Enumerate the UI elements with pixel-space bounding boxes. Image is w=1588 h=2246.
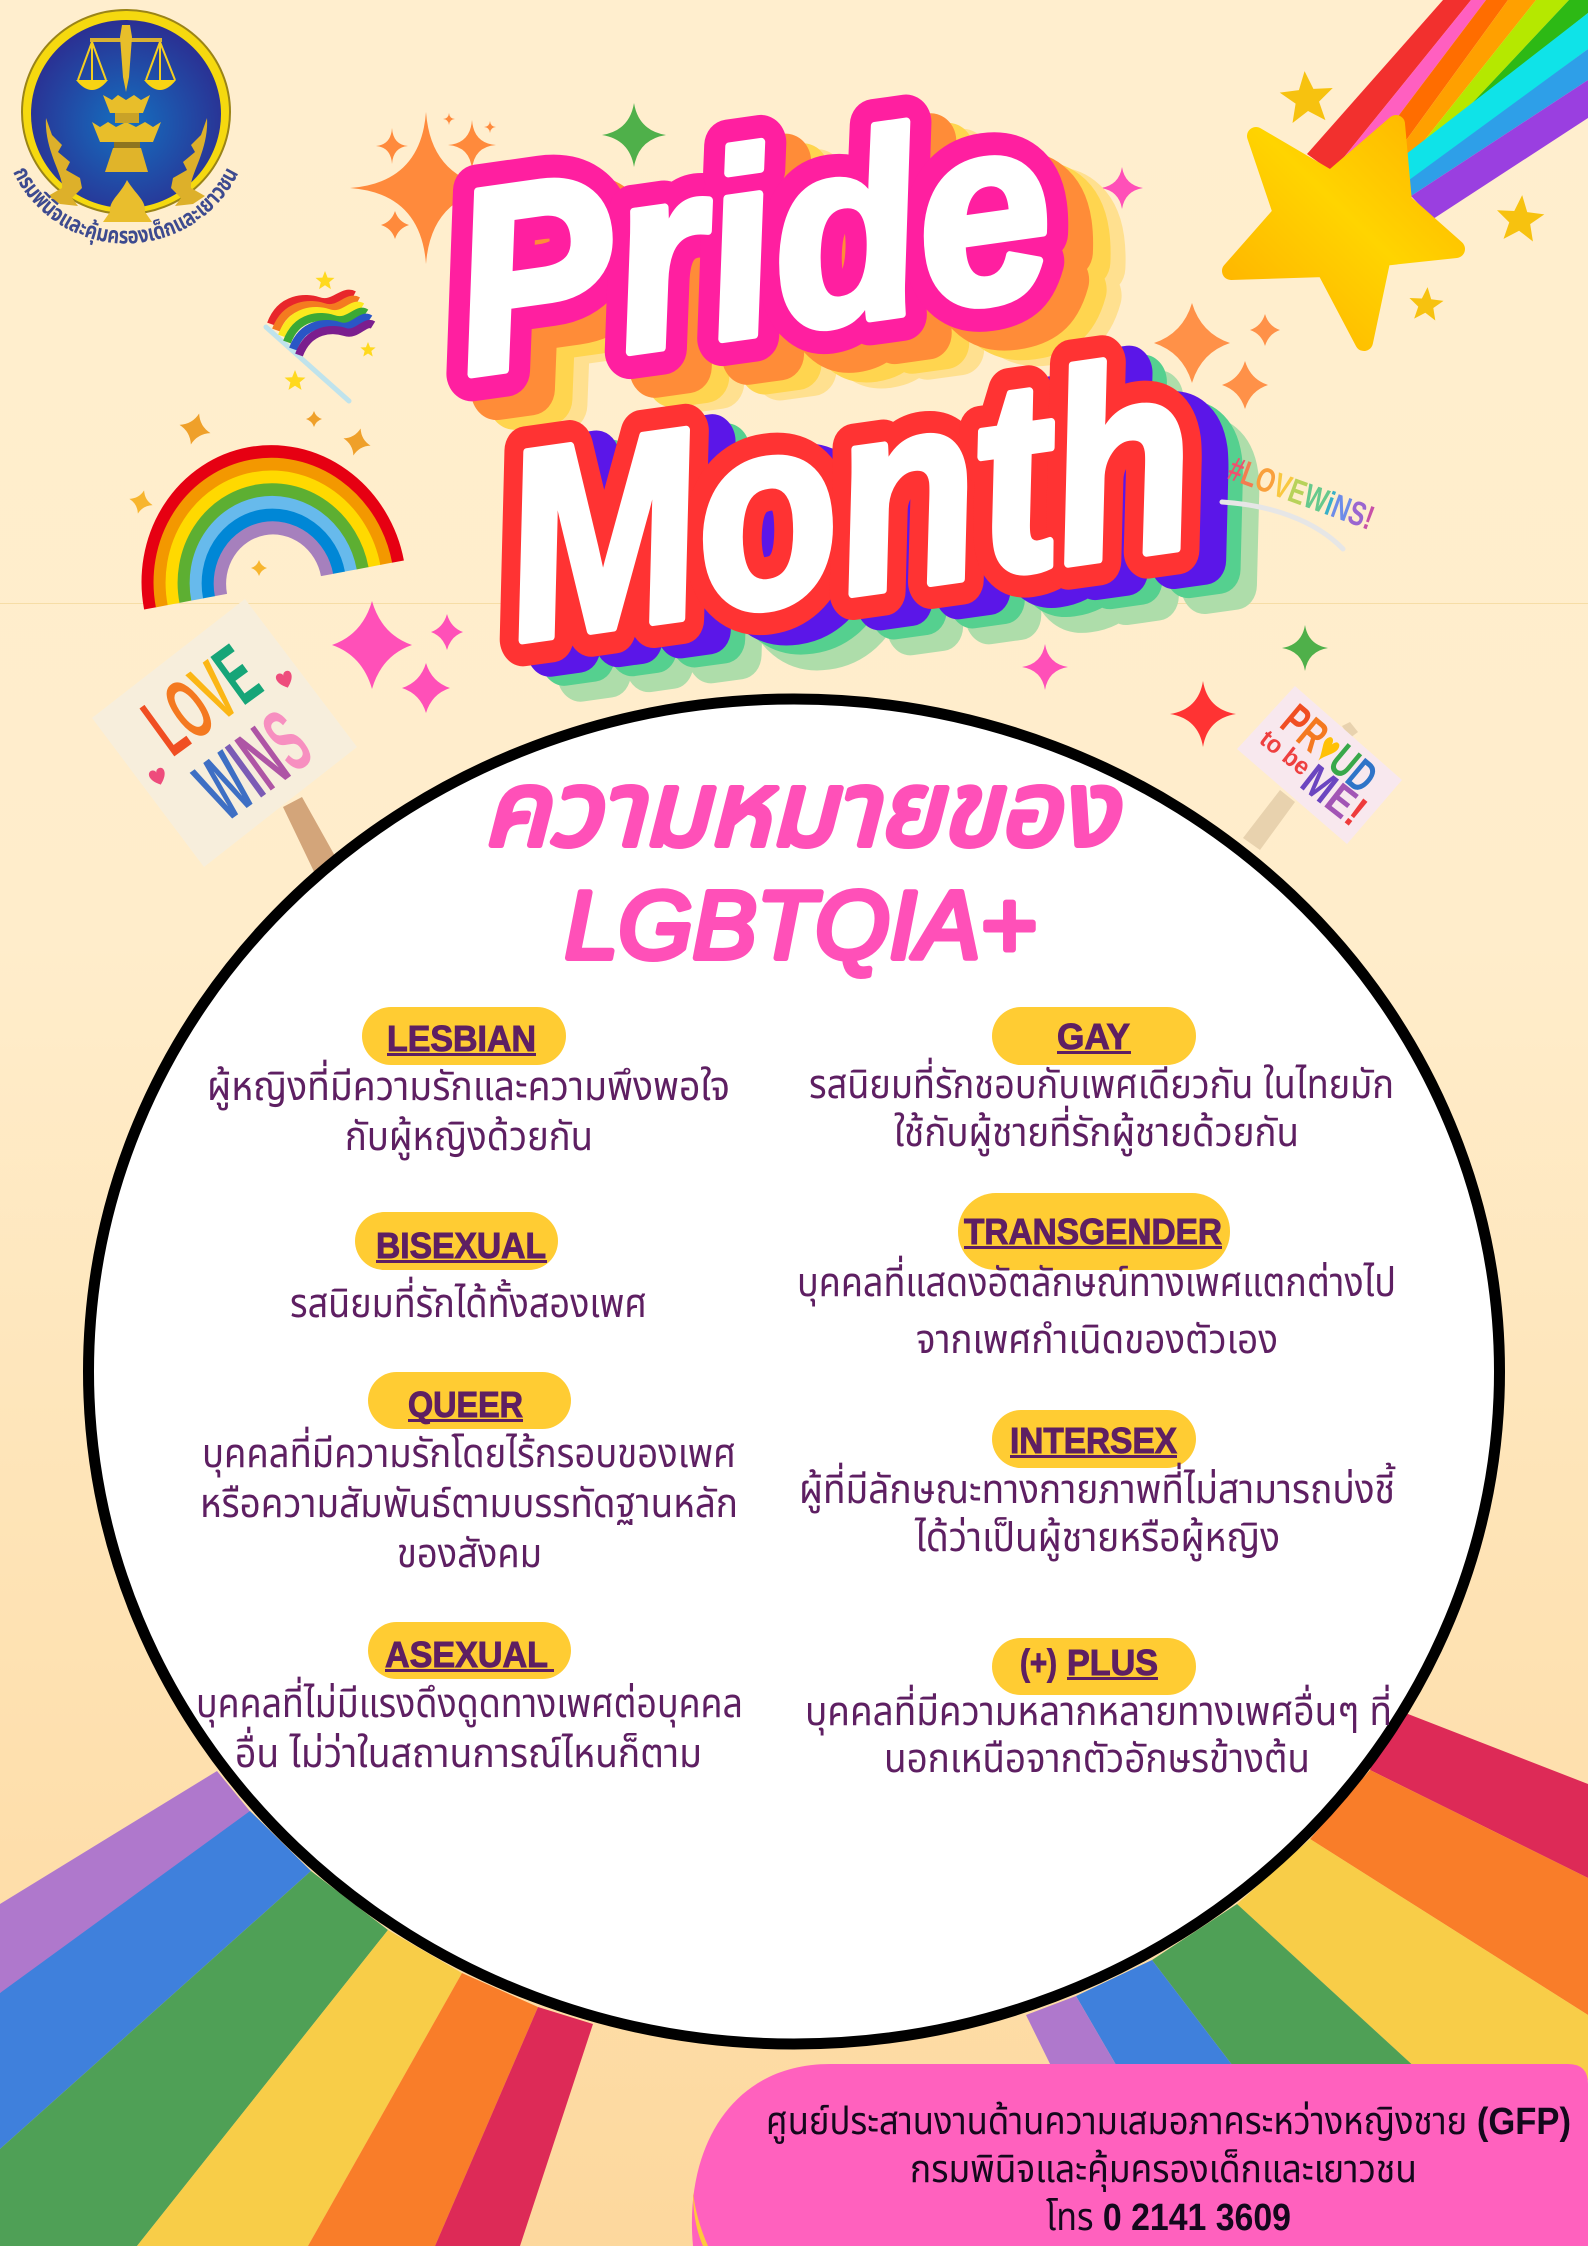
main white circle bbox=[88, 699, 1500, 2044]
entry: plus: PLUS bbox=[1067, 1642, 1158, 1683]
sparkles: right misc bbox=[1022, 167, 1328, 747]
title: Pride: Pride bbox=[491, 91, 1126, 465]
sign: love wins: LOVE bbox=[127, 628, 277, 773]
hashtag: love wins: #LOVEWiNS! bbox=[1223, 450, 1379, 538]
title: Pride: Pride bbox=[476, 85, 1111, 459]
small stars bbox=[1278, 69, 1546, 321]
title: Month: Month bbox=[484, 304, 1211, 698]
title: Pride: Pride bbox=[434, 57, 1069, 430]
footer text bbox=[766, 2101, 1571, 2239]
sparkles: pink left bbox=[332, 601, 463, 713]
entry: intersex: INTERSEX bbox=[1010, 1420, 1177, 1461]
entry: asexual: อื่น ไม่ว่าในสถานการณ์ไหนก็ตาม bbox=[235, 1726, 702, 1776]
title: Month: Month bbox=[542, 339, 1269, 734]
rainbow rays lower right bbox=[1026, 1700, 1588, 2080]
entry: asexual: บุคคลที่ไม่มีแรงดึงดูดทางเพศต่อบุคคล bbox=[196, 1676, 743, 1727]
entry: queer: QUEER bbox=[408, 1384, 523, 1425]
footer text: ศูนย์ประสานงานด้านความเสมอภาคระหว่างหญิงชาย (GFP) bbox=[766, 2101, 1571, 2144]
sign: proud to be me bbox=[1237, 686, 1402, 850]
footer panel bbox=[692, 2064, 1588, 2246]
icon: department logo: กรมพินิจและคุ้มครองเด็กและเยาวชน bbox=[14, 168, 238, 246]
entry: lesbian: กับผู้หญิงด้วยกัน bbox=[345, 1115, 593, 1160]
sparkles: gold by rainbow bbox=[126, 409, 374, 576]
entry: plus bbox=[805, 1638, 1392, 1781]
heading: ความหมายของ bbox=[483, 752, 1120, 868]
entry: gay: รสนิยมที่รักชอบกับเพศเดียวกัน ในไทยมัก bbox=[809, 1057, 1394, 1107]
icon: rainbow flag bbox=[266, 294, 373, 401]
entry: gay: ใช้กับผู้ชายที่รักผู้ชายด้วยกัน bbox=[894, 1105, 1299, 1156]
sparkle: green top bbox=[602, 103, 666, 167]
entry: queer bbox=[200, 1372, 738, 1576]
rainbow rays lower left bbox=[0, 1771, 593, 2246]
sign: love wins: WINS bbox=[179, 692, 328, 839]
entry: intersex bbox=[799, 1410, 1396, 1561]
entry: transgender: จากเพศกำเนิดของตัวเอง bbox=[916, 1318, 1278, 1362]
shooting star rainbow bbox=[1307, 0, 1588, 219]
sparkles: orange left bbox=[350, 112, 502, 264]
entry: asexual bbox=[196, 1622, 743, 1776]
heading: LGBTQIA+ bbox=[565, 872, 1036, 979]
entry: plus: บุคคลที่มีความหลากหลายทางเพศอื่นๆ ที่ bbox=[805, 1684, 1392, 1735]
entry: bisexual: รสนิยมที่รักได้ทั้งสองเพศ bbox=[290, 1276, 647, 1326]
sign: proud to be me: PR♥UD bbox=[1272, 694, 1388, 803]
sign: love wins bbox=[92, 599, 357, 880]
title: Month: Month bbox=[511, 314, 1238, 709]
entry: intersex: ได้ว่าเป็นผู้ชายหรือผู้หญิง bbox=[914, 1516, 1280, 1561]
title: Month: Month bbox=[484, 304, 1211, 698]
entry: lesbian bbox=[207, 1007, 730, 1160]
heading bbox=[483, 752, 1120, 979]
stars around flag bbox=[285, 271, 376, 390]
entry: gay bbox=[809, 1007, 1394, 1156]
footer text: กรมพินิจและคุ้มครองเด็กและเยาวชน bbox=[910, 2149, 1417, 2192]
entry: queer: หรือความสัมพันธ์ตามบรรทัดฐานหลัก bbox=[200, 1482, 738, 1526]
icon: rainbow arch bbox=[125, 430, 398, 608]
entry: lesbian: ผู้หญิงที่มีความรักและความพึงพอใจ bbox=[207, 1059, 730, 1110]
entry: bisexual: BISEXUAL bbox=[376, 1225, 546, 1266]
sparkles: orange right bbox=[1154, 303, 1280, 409]
entry: plus: นอกเหนือจากตัวอักษรข้างต้น bbox=[884, 1737, 1310, 1781]
entry: gay: GAY bbox=[1057, 1016, 1130, 1057]
title: Pride: Pride bbox=[459, 76, 1094, 449]
sign: proud to be me: ME! bbox=[1292, 755, 1376, 836]
icon: big yellow star bbox=[1231, 124, 1456, 342]
title: Pride: Pride bbox=[434, 57, 1069, 430]
entry: lesbian: LESBIAN bbox=[387, 1018, 536, 1059]
entry: plus: (+) bbox=[1020, 1642, 1057, 1683]
entry: intersex: ผู้ที่มีลักษณะทางกายภาพที่ไม่สามารถบ่งชี้ bbox=[799, 1462, 1396, 1513]
entry: transgender bbox=[797, 1193, 1396, 1362]
title: Month: Month bbox=[525, 324, 1252, 718]
sign: proud to be me: to be bbox=[1254, 725, 1316, 781]
entry: bisexual bbox=[290, 1212, 647, 1326]
entry: queer: ของสังคม bbox=[397, 1532, 542, 1576]
entry: transgender: TRANSGENDER bbox=[964, 1211, 1222, 1252]
icon: department logo bbox=[14, 9, 238, 246]
entry: transgender: บุคคลที่แสดงอัตลักษณ์ทางเพศแตกต่างไป bbox=[797, 1255, 1396, 1306]
entry: queer: บุคคลที่มีความรักโดยไร้กรอบของเพศ bbox=[202, 1426, 736, 1477]
footer text: โทร 0 2141 3609 bbox=[1046, 2197, 1291, 2239]
entry: asexual: ASEXUAL bbox=[385, 1634, 548, 1675]
